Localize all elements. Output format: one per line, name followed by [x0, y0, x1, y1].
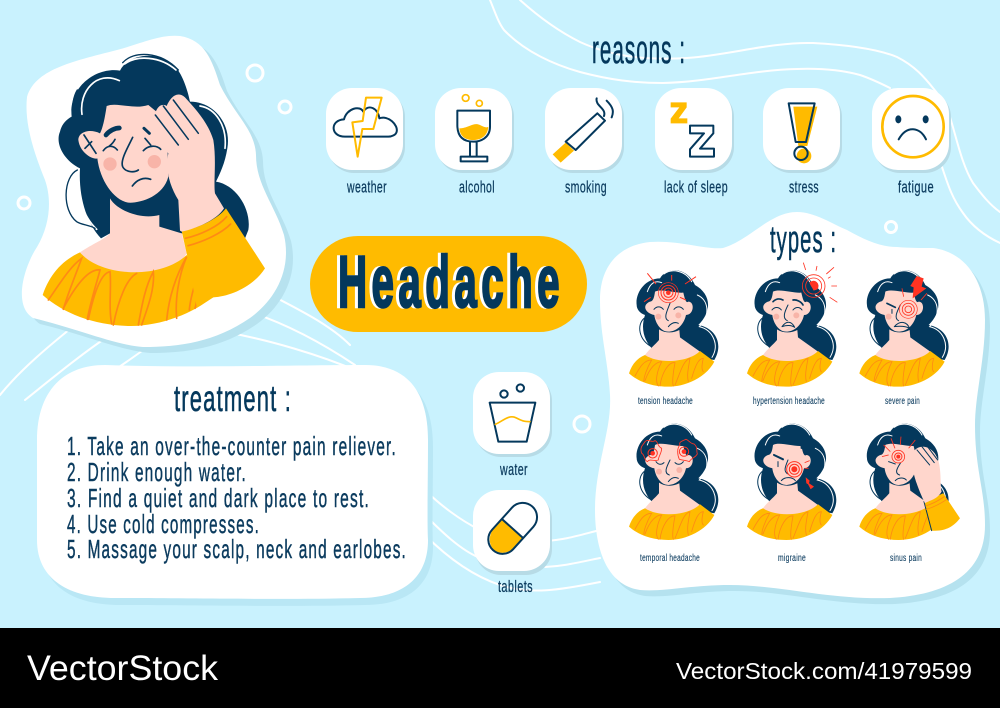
figure: hypertension headache	[747, 263, 837, 407]
label: fatigue: fatigue	[898, 178, 934, 196]
label: stress: stress	[789, 178, 819, 196]
figure: sinus pain	[859, 424, 960, 564]
icon: capsule	[482, 497, 543, 560]
title: Headache	[338, 242, 564, 323]
icon: cloud and lightning	[334, 98, 397, 157]
reason card: smoking	[545, 88, 624, 196]
label: tablets: tablets	[498, 578, 533, 596]
panel: types	[595, 212, 990, 604]
icon: exclamation mark	[789, 103, 817, 163]
icon: z z	[671, 102, 714, 157]
icon: cigarette	[553, 98, 613, 163]
treatment list: 5. Massage your scalp, neck and earlobes.	[67, 534, 407, 564]
icon: sad face	[882, 96, 944, 157]
panel: treatment	[37, 365, 433, 606]
label: weather: weather	[346, 178, 387, 196]
label: alcohol: alcohol	[459, 178, 495, 196]
figure: migraine	[747, 424, 836, 564]
label: temporal headache: temporal headache	[640, 553, 700, 564]
treatment list: 3. Find a quiet and dark place to rest.	[67, 483, 370, 513]
reason card: stress	[763, 88, 842, 196]
label: water: water	[499, 461, 528, 479]
label: sinus pain: sinus pain	[890, 553, 922, 564]
reason card: weather	[326, 88, 405, 196]
label: hypertension headache: hypertension headache	[753, 396, 825, 407]
portrait panel	[22, 36, 293, 353]
heading: treatment: treatment :	[174, 378, 292, 419]
woman holding her forehead	[43, 54, 265, 326]
label: smoking: smoking	[565, 178, 607, 196]
figure: tension headache	[629, 270, 718, 407]
heading: reasons: reasons :	[592, 28, 686, 72]
label: tension headache: tension headache	[638, 396, 693, 407]
title pill	[310, 236, 587, 332]
label: lack of sleep: lack of sleep	[664, 178, 728, 196]
remedy card: water	[473, 372, 552, 479]
figure: severe pain	[859, 270, 949, 407]
brand: VectorStock	[27, 649, 219, 688]
figure: temporal headache	[629, 424, 718, 564]
treatment list: 2. Drink enough water.	[67, 457, 247, 487]
label: severe pain: severe pain	[885, 396, 920, 407]
treatment list	[67, 431, 407, 564]
treatment list: 4. Use cold compresses.	[67, 509, 260, 539]
icon: glass of water	[490, 384, 535, 442]
heading: types: types :	[770, 219, 837, 261]
remedy card: tablets	[473, 490, 552, 596]
icon: wine glass	[457, 95, 490, 161]
watermark bar	[0, 628, 1000, 708]
reason card: lack of sleep	[655, 88, 734, 196]
reason card: alcohol	[435, 88, 514, 196]
reason card: fatigue	[872, 88, 951, 196]
treatment list: 1. Take an over-the-counter pain reliever.	[67, 431, 397, 461]
image id: VectorStock.com/41979599	[676, 658, 972, 684]
title shadow: Headache	[335, 242, 561, 323]
label: migraine: migraine	[778, 553, 806, 564]
